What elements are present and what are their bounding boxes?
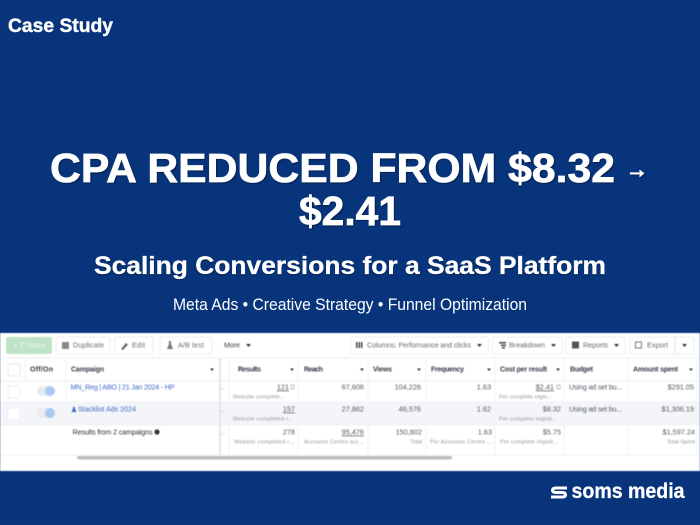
row: results total: 278 <box>283 428 295 436</box>
toolbar: + Create <box>13 340 45 350</box>
table header row: Campaign <box>71 366 104 374</box>
toolbar: Export <box>647 340 668 350</box>
title: CPA reduced <box>50 145 648 234</box>
title: CPA reduced: $2.41 <box>299 188 401 234</box>
toolbar: Edit <box>132 340 145 350</box>
table header row: Views <box>373 366 392 374</box>
toolbar <box>6 337 694 354</box>
heading: case study: Case Study <box>8 16 113 37</box>
table header row <box>30 366 693 374</box>
table header row: Budget <box>570 366 594 374</box>
row: MN_Reg campaign: $291.05 <box>668 382 694 392</box>
row: MN_Reg campaign: 1.63 <box>477 382 491 392</box>
row: Stacklist Ads 2024: $1,306.19 <box>662 404 694 414</box>
row: Stacklist Ads 2024 <box>37 404 694 422</box>
table grid and row backgrounds <box>0 358 700 455</box>
row: results total: 95,476 <box>342 428 364 436</box>
table header row: Results <box>238 366 261 374</box>
subtitle: Scaling Conversions for a SaaS Platform <box>94 252 606 280</box>
row: Stacklist Ads 2024: Per complete registr... <box>499 416 557 422</box>
row: Stacklist Ads 2024: $8.32 <box>543 404 561 414</box>
title: CPA reduced: CPA REDUCED FROM $8.32 <box>50 145 615 191</box>
logo: soms media: soms media <box>572 480 685 503</box>
row: MN_Reg campaign: 104,226 <box>395 382 421 392</box>
table header row: Frequency <box>431 366 464 374</box>
row: Stacklist Ads 2024: Website completed r... <box>233 416 293 422</box>
row: MN_Reg campaign: Website complete... <box>233 394 285 400</box>
row: results total: Total <box>410 440 422 446</box>
row: MN_Reg campaign: ... <box>220 382 226 392</box>
row: MN_Reg campaign <box>37 382 694 400</box>
toolbar: Duplicate <box>73 340 104 350</box>
row: MN_Reg campaign: Per complete regis... <box>499 394 552 400</box>
row: Stacklist Ads 2024: Stacklist Ads 2024 <box>78 404 136 414</box>
row: Stacklist Ads 2024: 157 <box>283 404 295 414</box>
table header row: Off/On <box>30 366 53 374</box>
row: Stacklist Ads 2024: ... <box>220 404 226 414</box>
panel: ads manager table screenshot <box>0 333 700 471</box>
row: Stacklist Ads 2024: 46,576 <box>399 404 421 414</box>
row: results total: Results from 2 campaigns <box>72 428 153 436</box>
row: results total <box>72 428 695 446</box>
table header row: Cost per result <box>500 366 548 374</box>
row: results total: 1.63 <box>478 428 492 436</box>
row: MN_Reg campaign: Using ad set bu... <box>569 382 622 392</box>
row: Stacklist Ads 2024: 27,862 <box>342 404 364 414</box>
toolbar: More <box>224 340 240 350</box>
row: MN_Reg campaign: 67,606 <box>342 382 364 392</box>
row: results total: Accounts Centre acc... <box>304 440 364 446</box>
row: results total: Per complete registr... <box>500 440 558 446</box>
row: results total: 150,802 <box>396 428 422 436</box>
toolbar: Columns: Performance and clicks <box>367 340 471 350</box>
row: MN_Reg campaign: 121 <box>277 382 289 392</box>
toolbar: A/B test <box>178 340 204 350</box>
services line: Meta Ads • Creative Strategy • Funnel Optimization <box>173 296 527 314</box>
row: results total: Total Spent <box>667 440 695 446</box>
scrollbar <box>77 456 452 460</box>
table header row: Reach <box>304 366 323 374</box>
row: results total: $5.75 <box>543 428 561 436</box>
row: results total: ... <box>220 428 226 436</box>
row: results total: Website completed r... <box>234 440 294 446</box>
toolbar: Breakdown <box>509 340 545 350</box>
row: results total: Per Accounts Centre ... <box>430 440 492 446</box>
table header row: Amount spent <box>633 366 679 374</box>
title: CPA reduced: → <box>626 157 648 182</box>
row: MN_Reg campaign: $2.41 <box>536 382 554 392</box>
row: Stacklist Ads 2024: 1.62 <box>477 404 491 414</box>
row: results total: $1,597.24 <box>663 428 695 436</box>
row: MN_Reg campaign: MN_Reg | ABO | 21 Jan 2024 - HP <box>70 382 175 392</box>
row: Stacklist Ads 2024: Using ad set bu... <box>569 404 622 414</box>
toolbar: Reports <box>583 340 608 350</box>
